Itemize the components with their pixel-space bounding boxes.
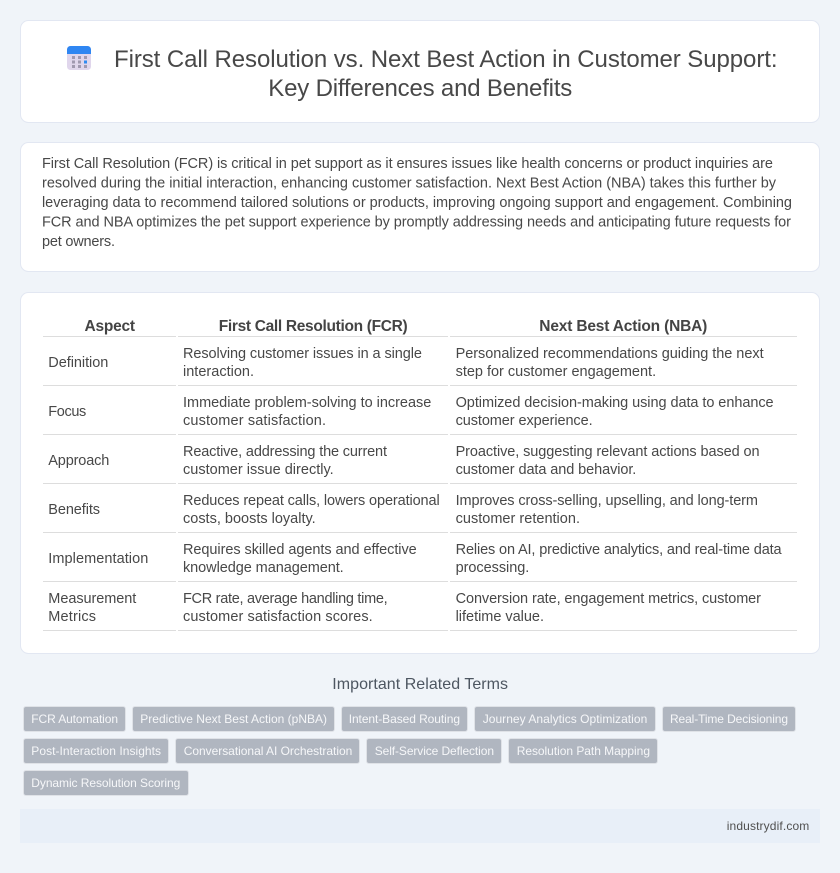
tag: Real-Time Decisioning: Real-Time Decisioning: [670, 712, 788, 726]
title: [114, 46, 778, 102]
table row: measurement metrics: Measurement: [48, 591, 136, 607]
table row: measurement metrics: Metrics: [48, 609, 96, 625]
title: First Call Resolution vs. Next Best Action in Customer Support:: [114, 46, 778, 73]
tag: Resolution Path Mapping: [508, 738, 658, 764]
tag: Predictive Next Best Action: [132, 706, 334, 732]
tag: Journey Analytics Optimization: [474, 706, 656, 732]
table row: benefits: Improves cross-selling, upselling, and long-term: [456, 493, 758, 509]
tag: Conversational AI Orchestration: [176, 738, 360, 764]
table row: approach: Reactive, addressing the current: [183, 444, 387, 460]
table row: measurement metrics: FCR rate, average handling time,: [183, 591, 388, 607]
table row: focus: customer satisfaction.: [183, 413, 326, 429]
tag: Post-Interaction Insights: [24, 738, 168, 764]
text block: introduction paragraph: pet owners.: [42, 234, 115, 250]
table row: definition: Resolving customer issues in a single: [183, 346, 422, 362]
table header: [84, 318, 707, 335]
footer source text: industrydif.com: [727, 819, 809, 833]
table header: Next Best Action (NBA): [539, 318, 707, 335]
tag: Intent-Based Routing: [342, 706, 468, 732]
table row: benefits: costs, boosts loyalty.: [183, 511, 316, 527]
table row: measurement metrics: [48, 591, 761, 625]
table row: implementation: Relies on AI, predictive analytics, and real-time data: [456, 542, 783, 558]
table row: definition: interaction.: [183, 364, 254, 380]
panel: introduction: [20, 142, 820, 272]
heading: important related terms: Important Related Terms: [332, 676, 508, 693]
tag: Post-Interaction Insights: Post-Interaction Insights: [31, 744, 161, 758]
table row: implementation: processing.: [456, 560, 529, 576]
table row: measurement metrics: Conversion rate, engagement metrics, customer: [456, 591, 761, 607]
tag: Predictive Next Best Action: Predictive Next Best Action (pNBA): [140, 712, 327, 726]
tag: Dynamic Resolution Scoring: [24, 770, 188, 796]
table header: First Call Resolution (FCR): [219, 318, 408, 335]
table header: Aspect: [84, 318, 135, 335]
icon: calendar: [67, 46, 91, 70]
table row: approach: [48, 444, 760, 478]
tag list: related terms: [24, 706, 796, 796]
table row: benefits: customer retention.: [456, 511, 580, 527]
table row: approach: customer data and behavior.: [456, 462, 636, 478]
text block: introduction paragraph: resolved during the initial interaction, enhancing customer satisfaction. Next Best Action (NBA) takes this further by: [42, 176, 777, 192]
panel: header: [20, 20, 820, 122]
table row: approach: customer issue directly.: [183, 462, 334, 478]
tag: FCR Automation: FCR Automation: [31, 712, 118, 726]
table row: implementation: Implementation: [48, 551, 148, 567]
panel: comparison table: [20, 292, 820, 654]
tag: Resolution Path Mapping: Resolution Path Mapping: [517, 744, 650, 758]
tag: Conversational AI Orchestration: Conversational AI Orchestration: [184, 744, 352, 758]
table row: focus: [48, 395, 774, 429]
table row: measurement metrics: customer satisfaction scores.: [183, 609, 373, 625]
table row: focus: customer experience.: [456, 413, 593, 429]
tag: FCR Automation: [24, 706, 126, 732]
table row: definition: Personalized recommendations guiding the next: [456, 346, 764, 362]
tag: Real-Time Decisioning: [662, 706, 796, 732]
title: Key Differences and Benefits: [268, 75, 572, 102]
tag: Self-Service Deflection: Self-Service Deflection: [375, 744, 494, 758]
table row: definition: step for customer engagement.: [456, 364, 656, 380]
tag: Self-Service Deflection: [366, 738, 502, 764]
table row: implementation: [48, 542, 783, 576]
table row: benefits: Reduces repeat calls, lowers operational: [183, 493, 440, 509]
text block: introduction paragraph: [42, 156, 792, 250]
table row: measurement metrics: lifetime value.: [456, 609, 544, 625]
footer band: [20, 809, 820, 843]
table row: focus: Optimized decision-making using data to enhance: [456, 395, 774, 411]
table row: implementation: Requires skilled agents and effective: [183, 542, 417, 558]
text block: introduction paragraph: First Call Resolution (FCR) is critical in pet support as it ensures issues like health concerns or product inquiries are: [42, 156, 773, 172]
tag: Journey Analytics Optimization: Journey Analytics Optimization: [483, 712, 647, 726]
table row: definition: [48, 346, 764, 380]
table row: focus: Focus: [48, 404, 86, 420]
tag: Intent-Based Routing: Intent-Based Routing: [349, 712, 460, 726]
text block: introduction paragraph: leveraging data to recommend tailored solutions or products, improving ongoing support and engagement. Combining: [42, 195, 792, 211]
table row: benefits: [48, 493, 758, 527]
table row: benefits: Benefits: [48, 502, 100, 518]
text block: introduction paragraph: FCR and NBA optimizes the pet support experience by promptly addressing needs and anticipating future requests for: [42, 214, 791, 230]
tag: Dynamic Resolution Scoring: Dynamic Resolution Scoring: [31, 776, 180, 790]
table row: definition: Definition: [48, 355, 108, 371]
table row: focus: Immediate problem-solving to increase: [183, 395, 431, 411]
table row: implementation: knowledge management.: [183, 560, 344, 576]
table row: approach: Approach: [48, 453, 109, 469]
table row: approach: Proactive, suggesting relevant actions based on: [456, 444, 760, 460]
